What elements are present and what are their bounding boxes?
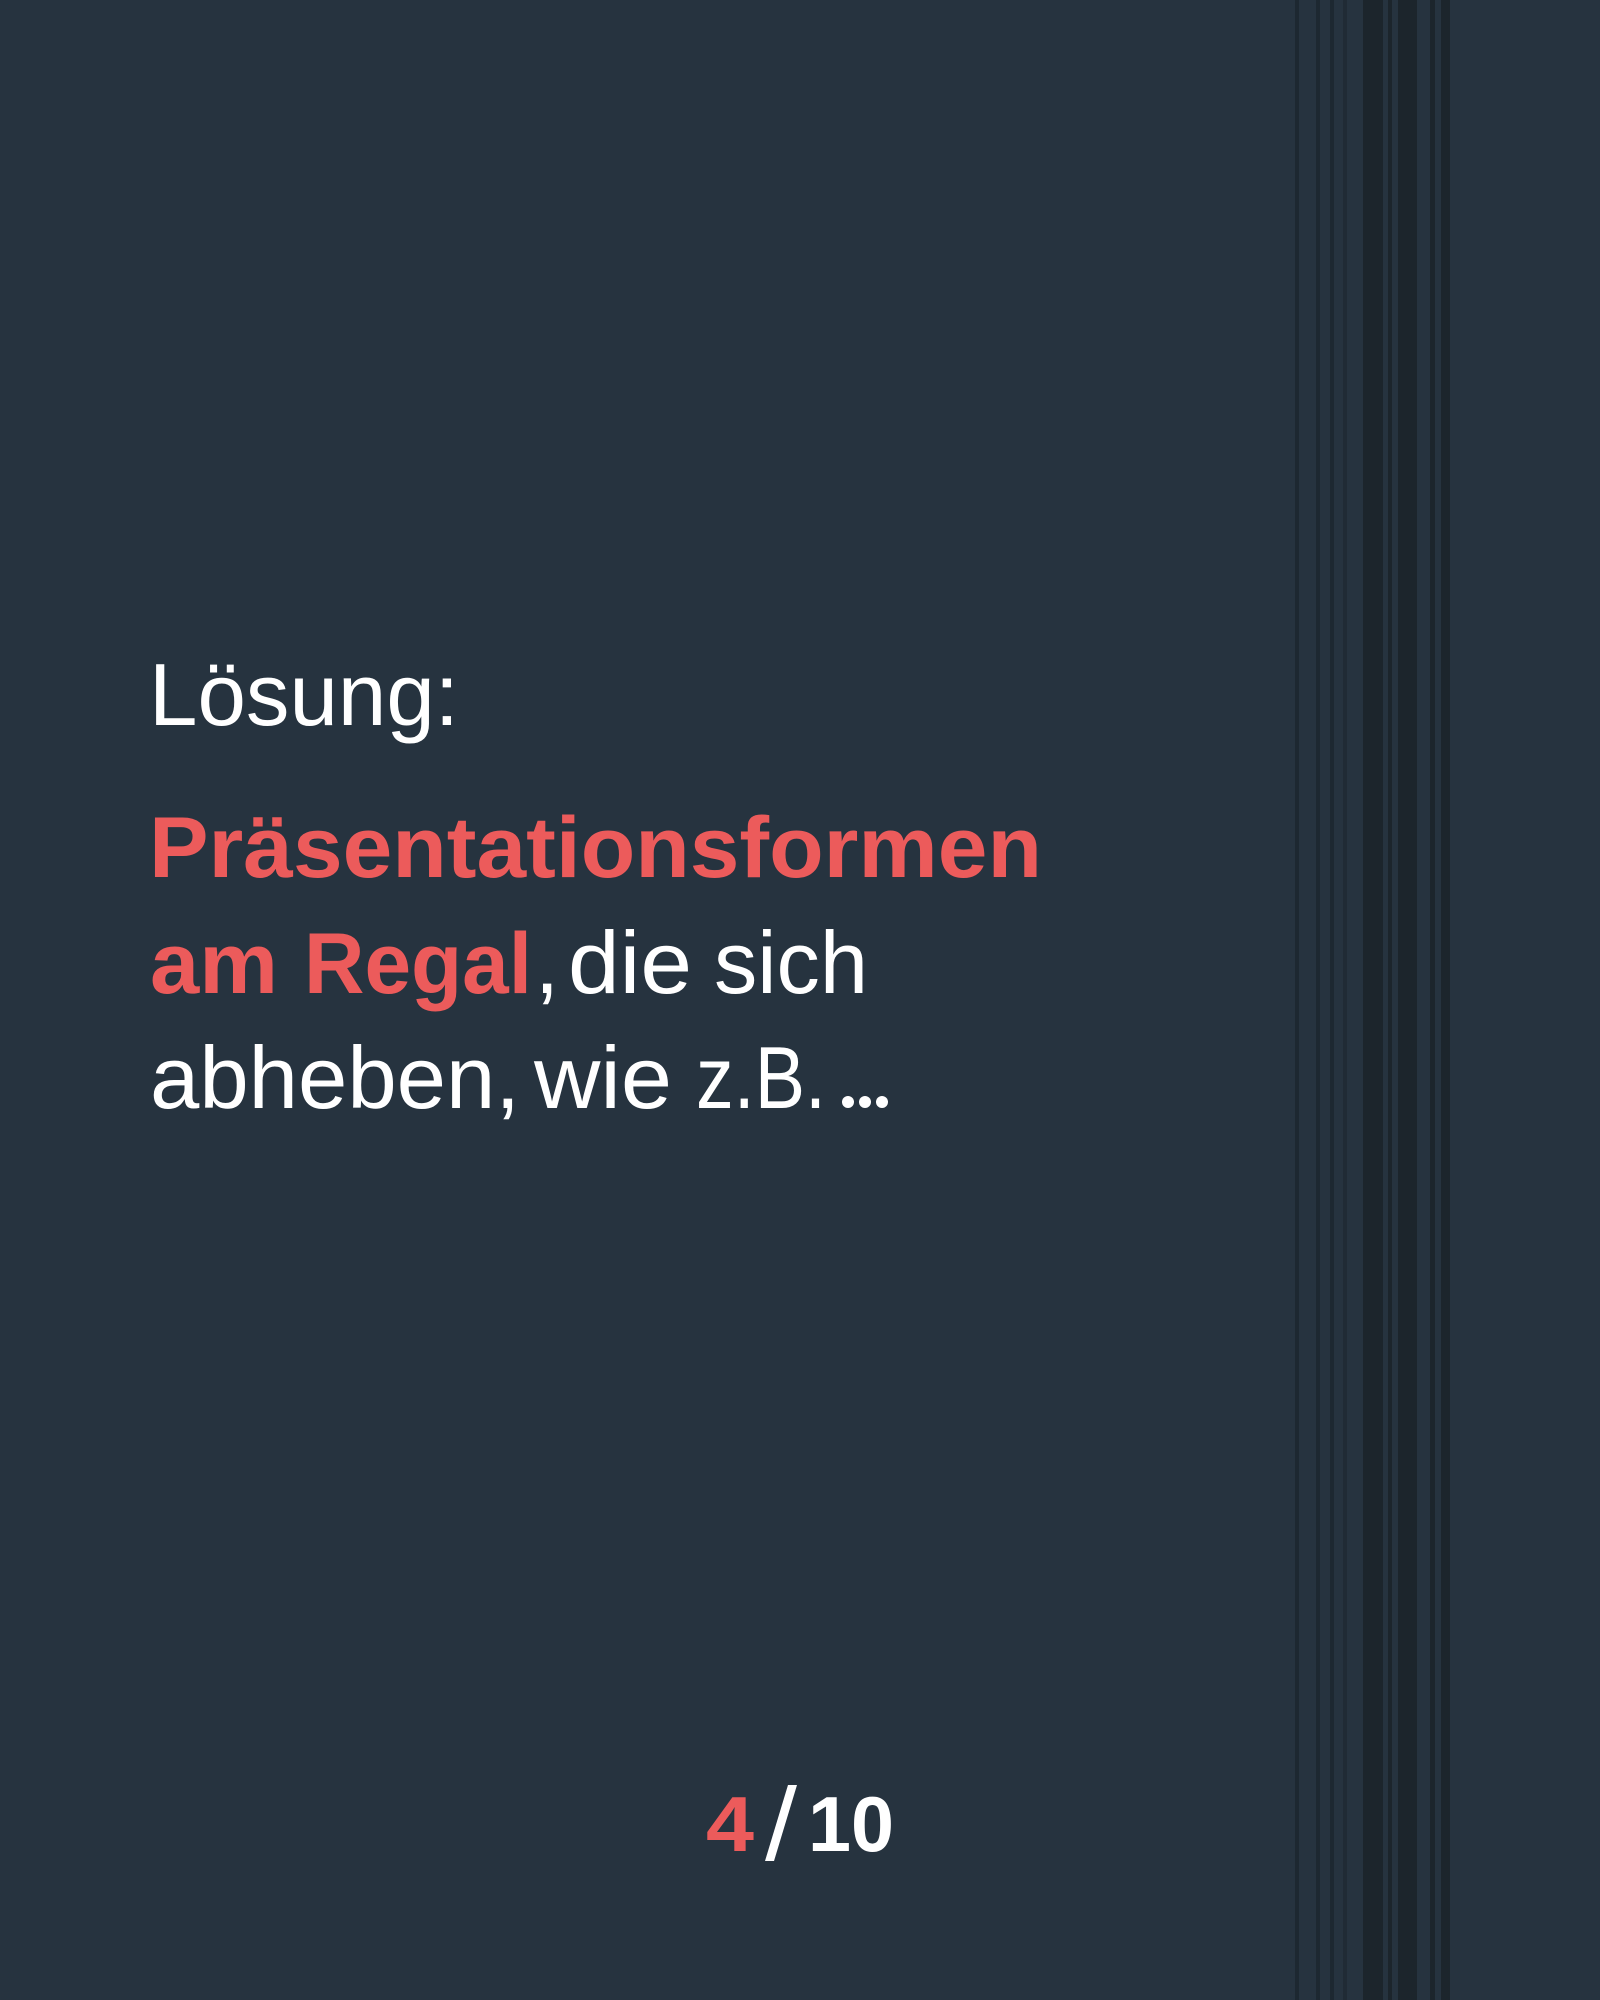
word: wie: wie: [533, 1028, 672, 1127]
slash: [765, 1785, 797, 1861]
heading: Lösung: Lösung:: [149, 645, 459, 744]
word: die: die: [568, 913, 692, 1012]
word: sich: sich: [714, 913, 868, 1012]
vertical stripes: [1295, 0, 1450, 2000]
current page number: 4: [706, 1780, 754, 1868]
highlighted line: Präsentationsformen: Präsentationsformen: [149, 800, 1042, 896]
main statement: [149, 800, 1042, 1127]
total pages: 10: [808, 1780, 894, 1868]
highlighted word: am: am: [150, 916, 278, 1012]
word: z.B.: z.B.: [696, 1028, 826, 1127]
comma after Regal: ,: [535, 913, 559, 1012]
highlighted word: Regal: Regal: [304, 916, 532, 1012]
word: abheben: abheben,: [150, 1028, 520, 1127]
page counter: [706, 1780, 894, 1868]
ellipsis: [842, 1096, 888, 1108]
